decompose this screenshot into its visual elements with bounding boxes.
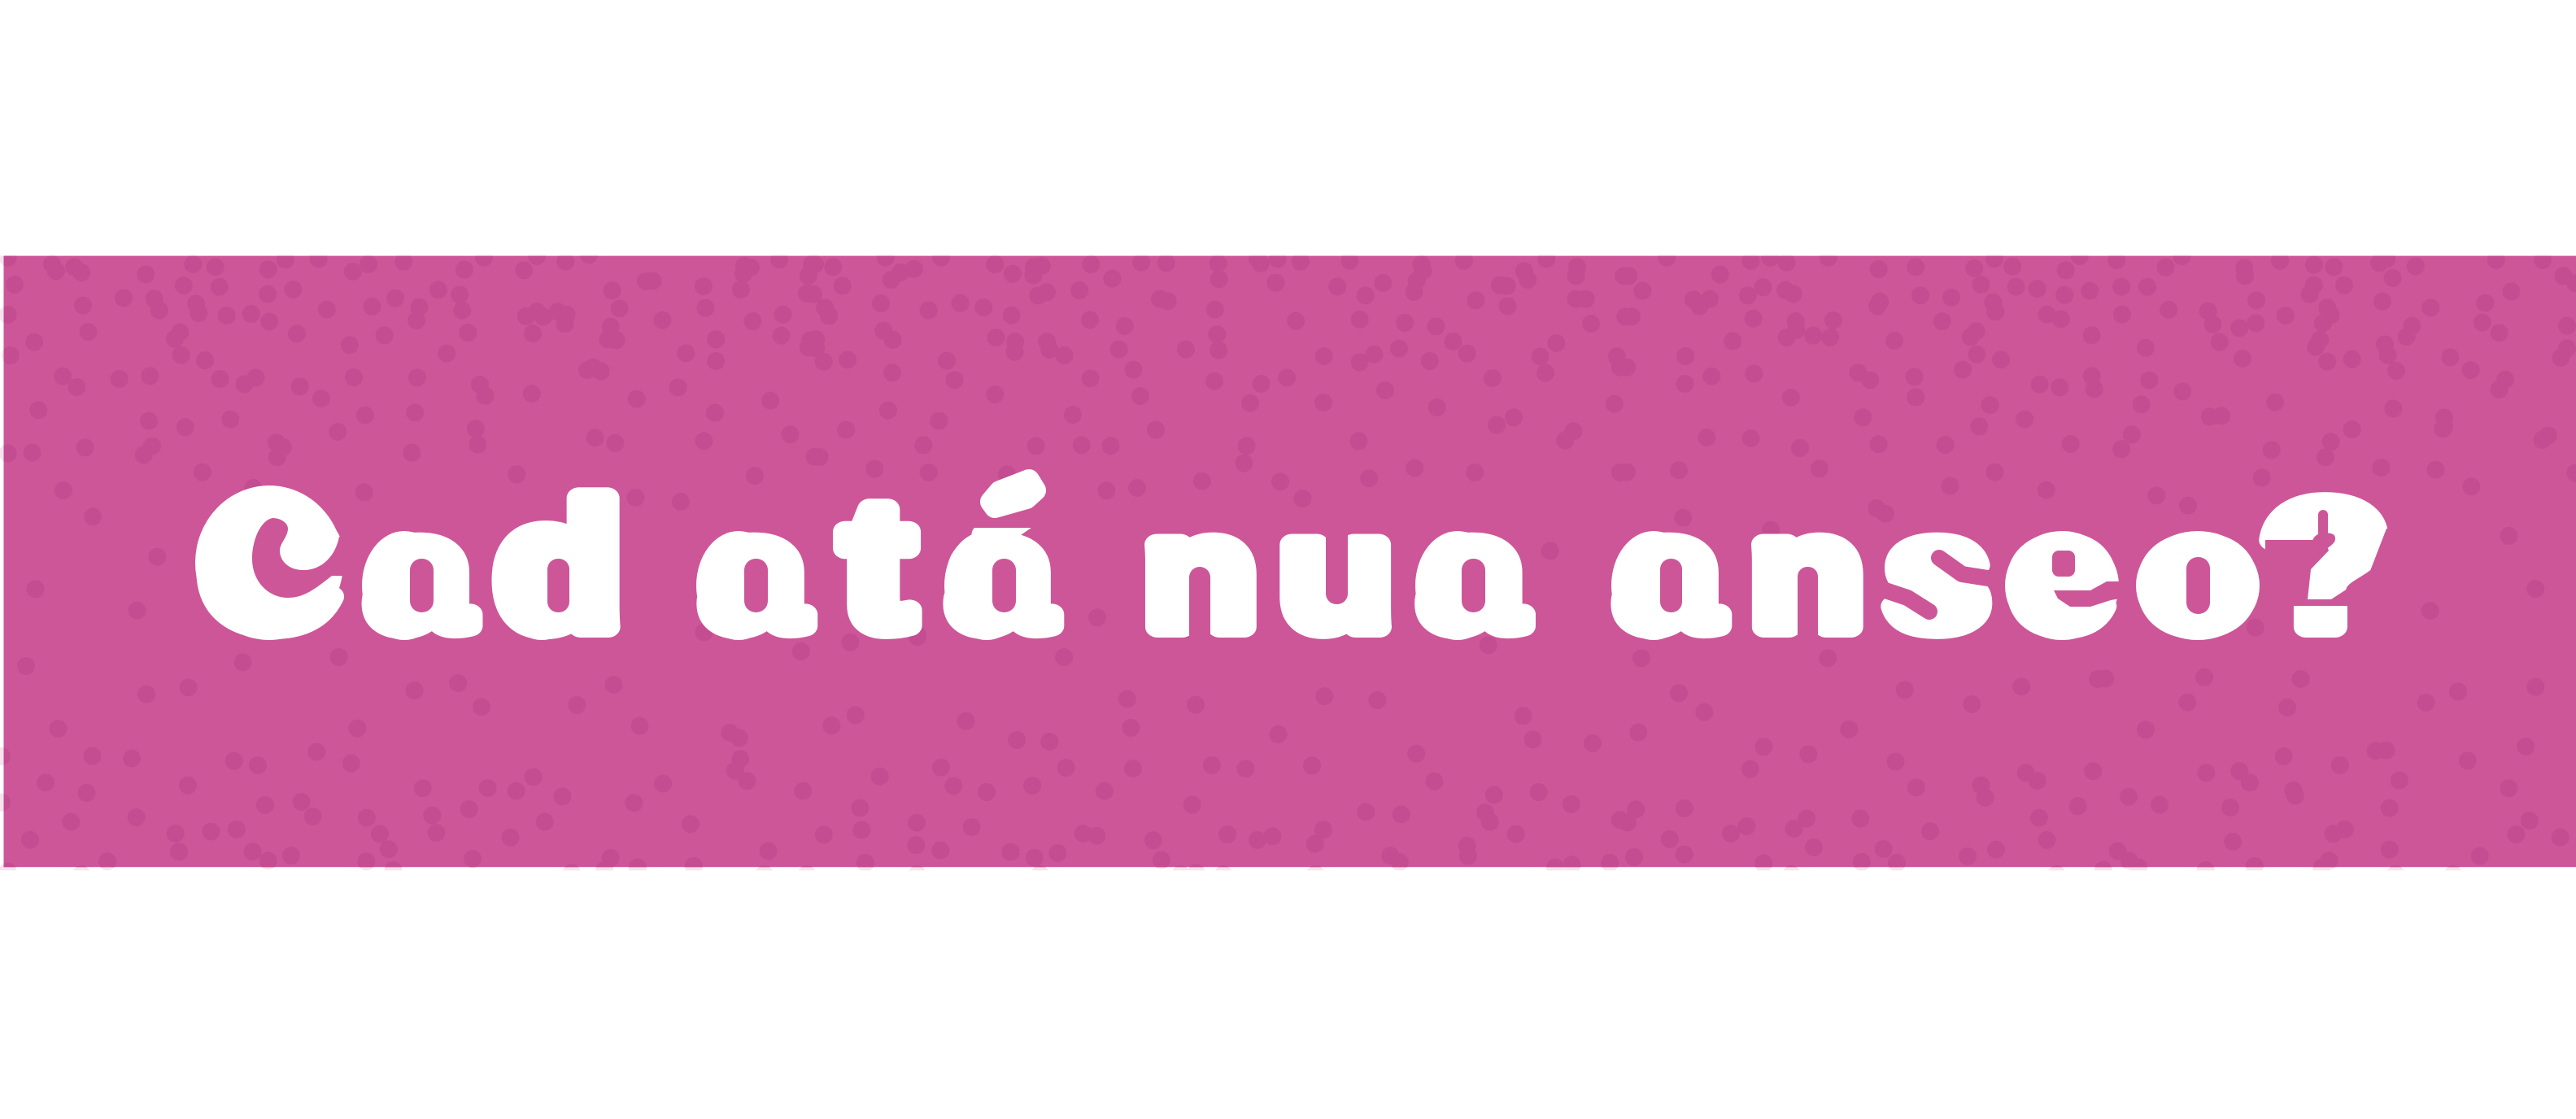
panel: pink speckled banner (2, 255, 2576, 874)
accent on á (991, 480, 1035, 507)
word: Cad: a (368, 486, 470, 661)
word: anseo?: n (1751, 486, 1862, 661)
word: Cad: C (201, 480, 337, 661)
word: atá: á (951, 486, 1053, 661)
banner fill (3, 256, 2576, 867)
word: atá: a (704, 486, 805, 661)
word: nua: u (1281, 486, 1392, 661)
word: atá: t (843, 464, 913, 665)
word: Cad: d (495, 466, 621, 665)
word: nua: n (1145, 486, 1256, 661)
speckle dots (2, 255, 2575, 874)
rounded letter bowls (195, 485, 2260, 640)
word: anseo?: a (1618, 486, 1720, 661)
title (195, 469, 2390, 640)
letter counters and notches (252, 510, 2398, 648)
word: nua: a (1422, 486, 1523, 661)
word: anseo?: o (2142, 486, 2253, 661)
faint dot bleed outside banner edge (2, 255, 2575, 874)
word: anseo?: ? (2262, 466, 2388, 665)
word: anseo?: s (1887, 486, 1987, 661)
word: anseo?: e (2012, 486, 2112, 661)
